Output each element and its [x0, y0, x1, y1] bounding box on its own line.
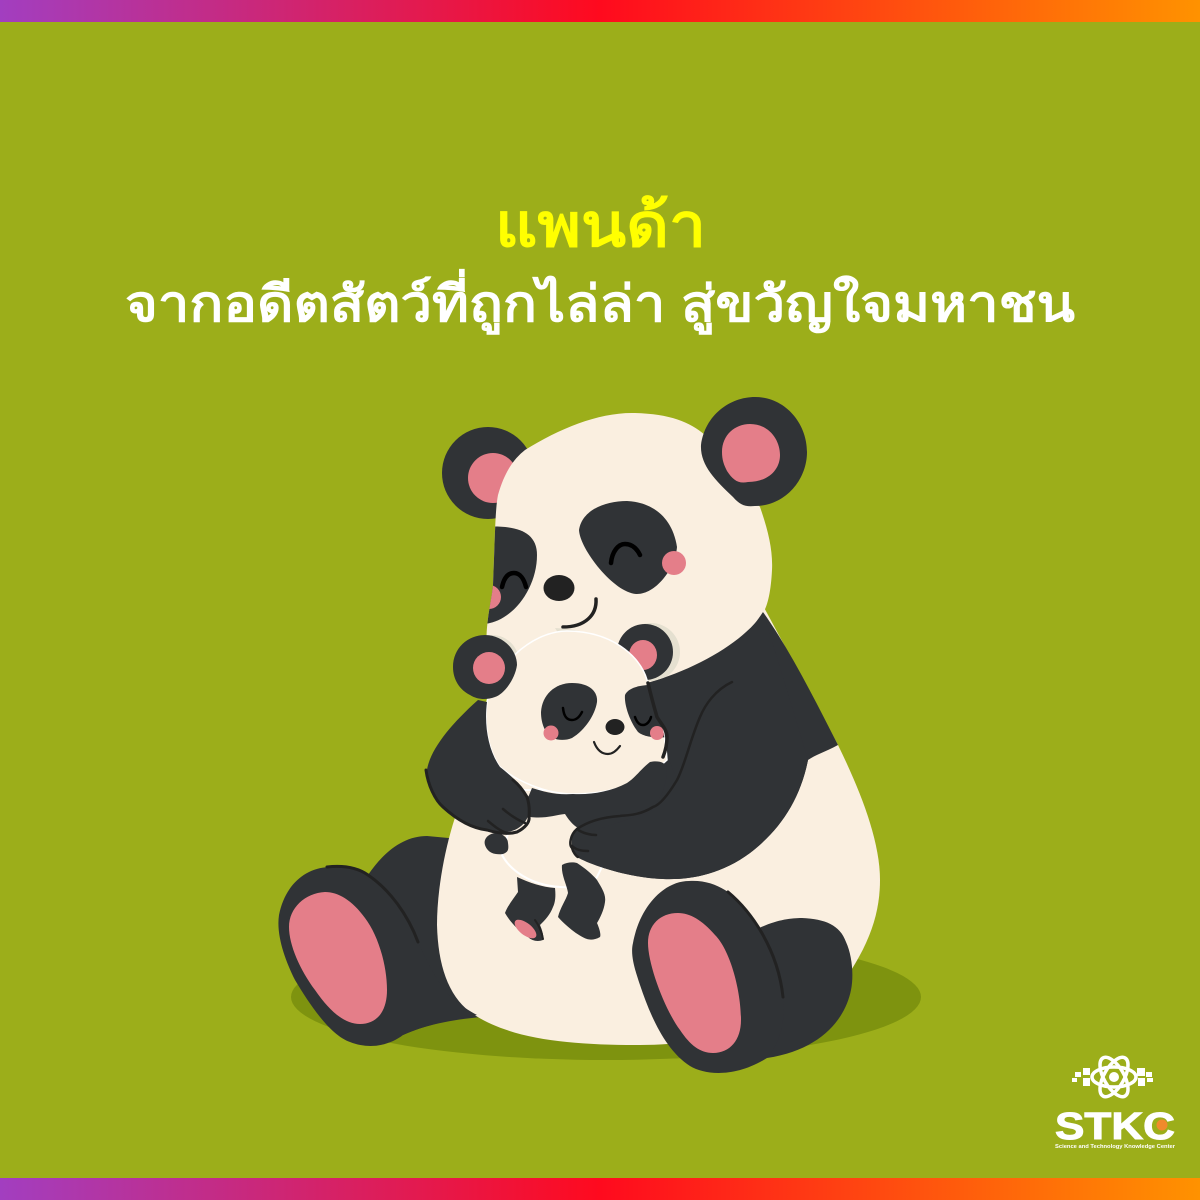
cub left eye — [541, 683, 597, 740]
cub body — [502, 790, 640, 887]
right foot pad — [648, 913, 741, 1053]
cub tail — [485, 833, 508, 854]
cub nose — [606, 719, 624, 735]
illustration: panda mother and cub — [278, 397, 921, 1073]
logo: STKC — [1055, 1053, 1176, 1150]
mother shoulder and arm — [567, 612, 838, 879]
left foot line — [327, 866, 418, 942]
mother smile — [563, 599, 596, 627]
cub head — [486, 631, 667, 794]
right foot line — [728, 892, 783, 997]
mother right ear — [701, 397, 807, 506]
top gradient bar — [0, 0, 1200, 22]
cub right ear — [617, 624, 673, 680]
mother right leg — [700, 918, 852, 1058]
cub left ear — [453, 635, 517, 699]
cub smile — [594, 742, 620, 754]
logo side squares — [1072, 1068, 1153, 1086]
logo atom icon — [1092, 1053, 1136, 1101]
mother left foot — [278, 866, 477, 1046]
bottom gradient bar — [0, 1178, 1200, 1200]
mother head — [486, 413, 772, 700]
cub right leg — [558, 862, 605, 940]
logo tagline: Science and Technology Knowledge Center — [1055, 1144, 1176, 1150]
logo wordmark: STKC — [1055, 1106, 1175, 1148]
mother left ear — [442, 427, 534, 519]
cub left leg — [505, 877, 555, 942]
ground shadow — [291, 934, 921, 1060]
mother nose — [544, 575, 574, 601]
contour lines — [426, 682, 732, 939]
cub front right arm — [527, 761, 667, 832]
cub ear shadows — [489, 623, 680, 681]
mother right eye — [579, 501, 686, 594]
cub right eye — [624, 685, 664, 740]
title: แพนด้า — [495, 192, 706, 259]
mother hugging arm — [572, 612, 808, 879]
title: จากอดีตสัตว์ที่ถูกไล่ล่า สู่ขวัญใจมหาชน — [125, 269, 1075, 335]
cub toe pad — [512, 916, 539, 942]
cub back arm — [530, 760, 667, 835]
left foot pad — [289, 892, 387, 1024]
logo orange dot — [1156, 1120, 1168, 1130]
cub left arm — [427, 700, 529, 833]
mother right foot — [632, 881, 784, 1073]
mother left eye — [487, 526, 537, 624]
mother body — [437, 600, 880, 1045]
mother left leg — [340, 836, 481, 1035]
title — [125, 192, 1075, 335]
